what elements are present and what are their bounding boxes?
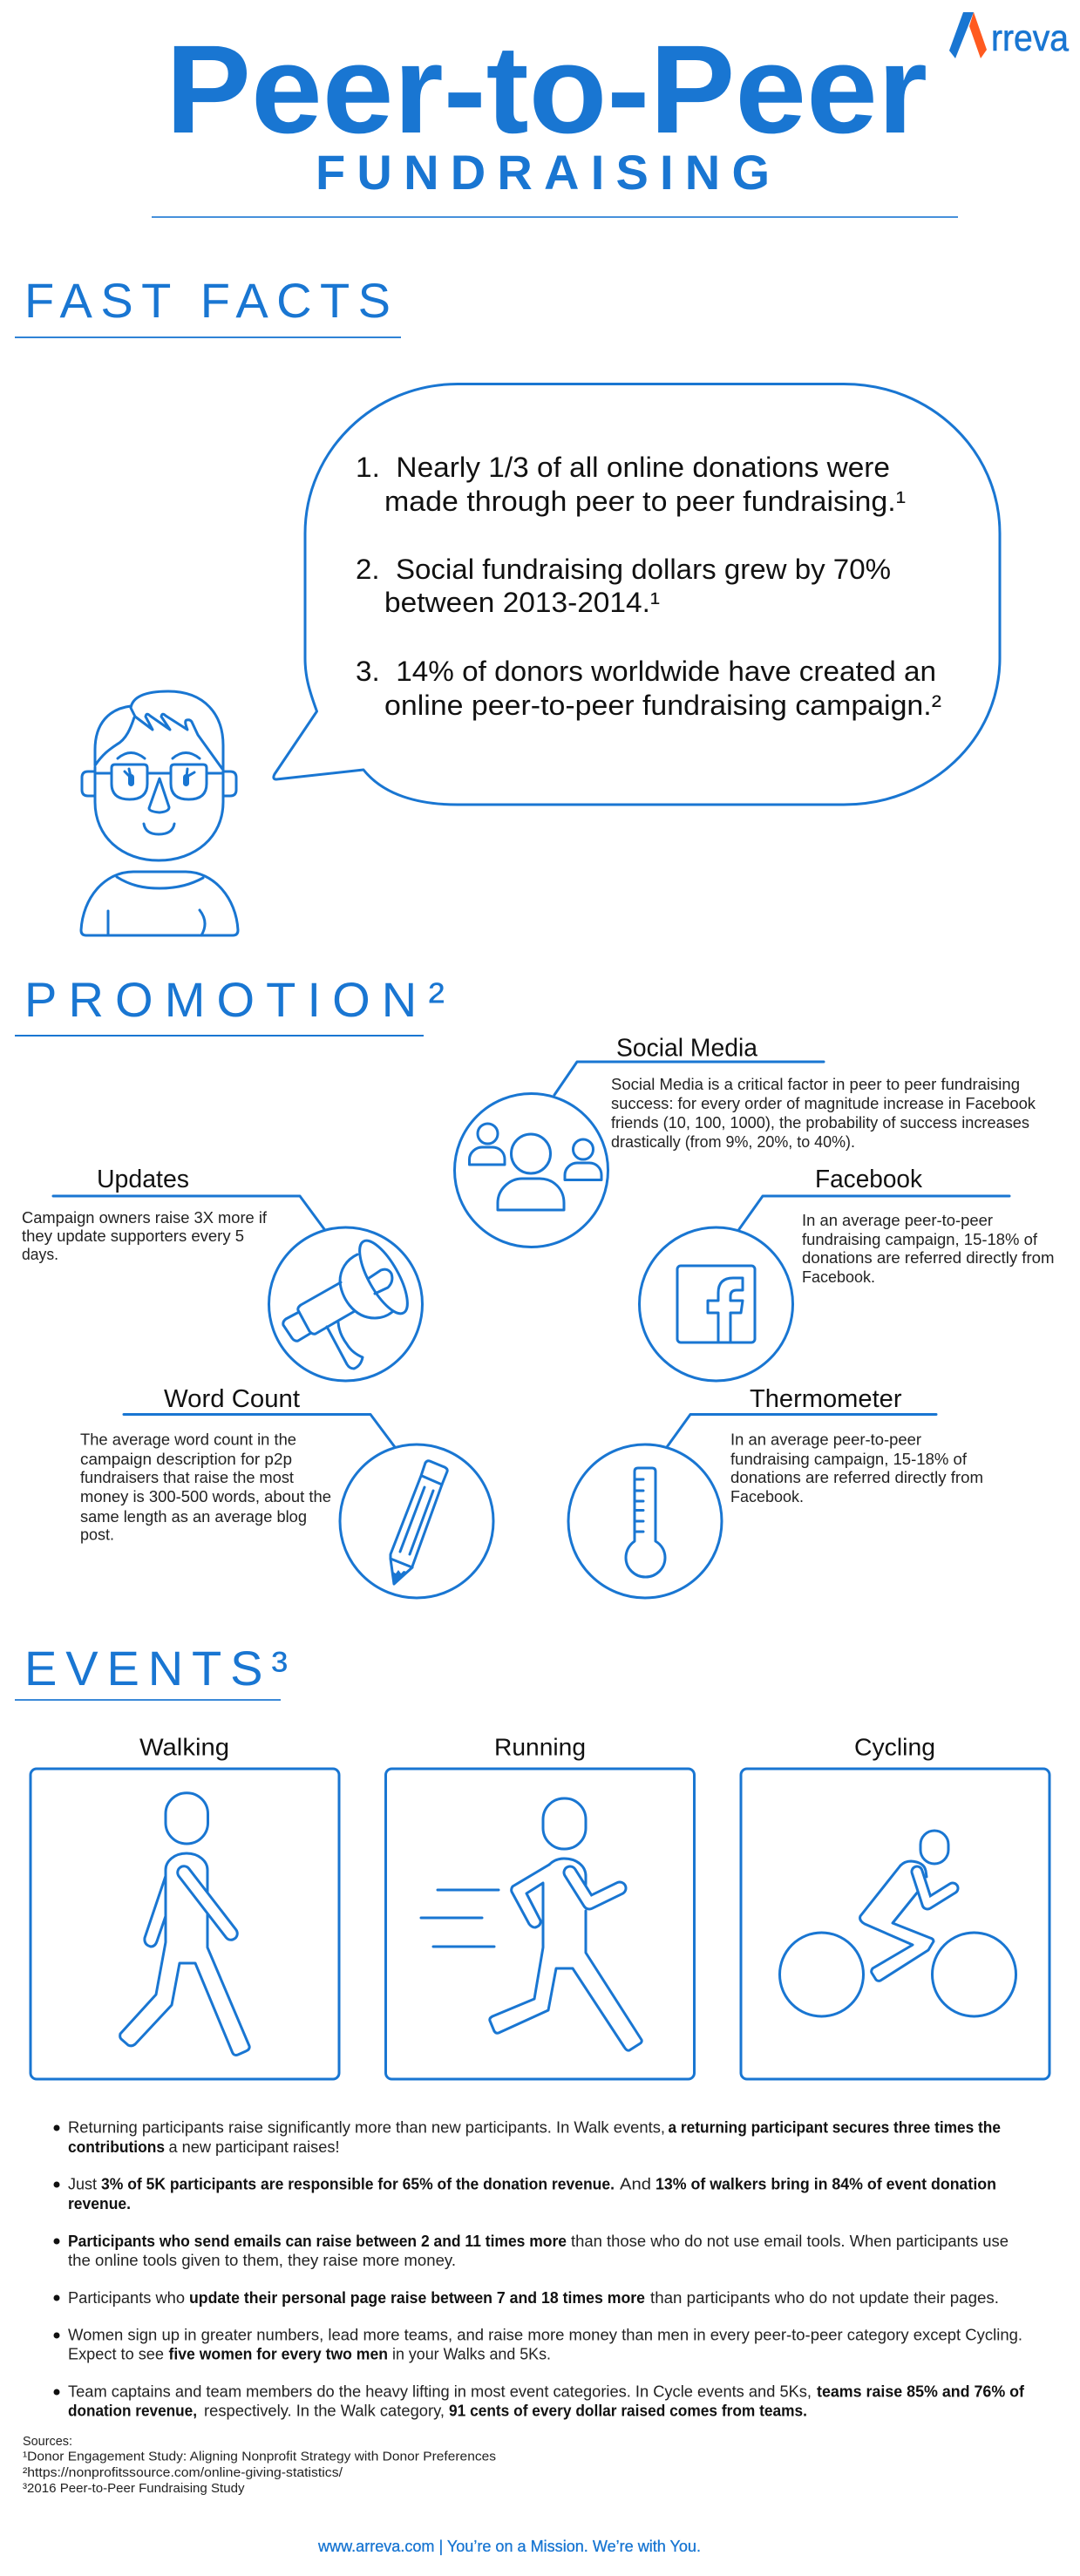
icon: cyclist [779,1831,1016,2016]
logo: Arreva [949,12,1069,59]
panel: Facebook: donations are referred directly from [802,1249,1055,1267]
bullet: team captains [54,2383,1025,2420]
icon: pencil [340,1444,493,1598]
panel: Cycling: Cycling [854,1733,935,1761]
panel: Thermometer [568,1385,983,1598]
bullet: women and men: five women for every two men [169,2345,388,2362]
bullet: 5K participants: Just [68,2176,97,2193]
panel: Social Media: friends (10, 100, 1000), the probability of success increases [611,1114,1029,1132]
panel: Social Media [455,1034,1036,1247]
text block: sources: ¹Donor Engagement Study: Aligning Nonprofit Strategy with Donor Preferences [23,2450,496,2464]
icon: thermometer [568,1444,722,1598]
panel: Word Count [80,1385,493,1598]
icon: people [455,1093,608,1247]
panel: fast facts speech bubble: made through peer to peer fundraising.¹ [384,486,906,517]
panel: Updates: Campaign owners raise 3X more if [22,1209,268,1227]
panel: Facebook: Facebook. [802,1268,875,1286]
panel: Running [385,1733,694,2079]
bullet: returning participants: Returning participants raise significantly more than new participants. In Walk events, [68,2118,665,2136]
panel: Walking [31,1733,339,2079]
panel: Thermometer: fundraising campaign, 15-18% of [730,1451,968,1468]
text block: sources [23,2434,496,2496]
bullet: team captains: Team captains and team members do the heavy lifting in most event categories. In Cycle events and 5Ks, [68,2383,812,2401]
bullet: email tools: Participants who send emails can raise between 2 and 11 times more [68,2233,567,2250]
panel: Thermometer: Thermometer [750,1385,902,1413]
heading: Events: EVENTS³ [24,1641,288,1696]
bullet: returning participants [54,2118,1001,2156]
bullet: 5K participants [54,2176,996,2212]
bullet: returning participants: a returning participant secures three times the [668,2118,1001,2136]
text block: sources: ³2016 Peer-to-Peer Fundraising Study [23,2481,245,2496]
panel: Thermometer: Facebook. [730,1488,804,1505]
bullet: personal page: Participants who [68,2289,185,2307]
panel: fast facts speech bubble [274,384,1000,805]
panel: fast facts speech bubble: online peer-to-peer fundraising campaign.² [384,690,941,721]
title: Peer-to-Peer [166,19,927,160]
bullet: email tools: the online tools given to them, they raise more money. [68,2252,456,2269]
bullet: personal page [54,2289,999,2307]
bullet: team captains: donation revenue, [68,2403,197,2420]
bullet: team captains: respectively. In the Walk category, [204,2403,445,2420]
panel: fast facts speech bubble: 2. Social fundraising dollars grew by 70% [356,554,891,585]
panel: fast facts speech bubble: between 2013-2014.¹ [384,587,660,618]
bullet: returning participants: contributions [68,2138,165,2156]
bullet: women and men [54,2326,1022,2362]
panel: Updates: days. [22,1246,58,1263]
panel: Social Media: Social Media is a critical factor in peer to peer fundraising [611,1076,1020,1093]
title: FUNDRAISING [316,145,770,200]
bullet: women and men: Expect to see [68,2345,164,2362]
bullet: returning participants: a new participant raises! [169,2138,340,2156]
panel: Thermometer: In an average peer-to-peer [730,1431,921,1449]
panel: Social Media: Social Media [616,1034,758,1062]
text block: sources: ²https://nonprofitssource.com/online-giving-statistics/ [23,2465,343,2480]
panel: Updates [22,1166,422,1381]
text block: sources: Sources: [23,2434,72,2449]
bullet: email tools: than those who do not use email tools. When participants use [571,2233,1009,2250]
bullet: 5K participants: 13% of walkers bring in 84% of event donation [655,2176,996,2193]
panel: Facebook: Facebook [815,1166,922,1193]
bullet: women and men: Women sign up in greater numbers, lead more teams, and raise more money than men in every peer-to-peer category except Cycling. [68,2326,1022,2343]
bullet: 5K participants: 3% of 5K participants are responsible for 65% of the donation revenue. [101,2176,615,2193]
panel: Word Count: money is 300-500 words, about the [80,1488,331,1505]
panel: Word Count: The average word count in the [80,1431,296,1449]
panel: Updates: they update supporters every 5 [22,1227,244,1245]
icon: person with glasses [81,691,238,935]
text block: event findings [54,2118,1025,2420]
panel: Social Media: success: for every order of magnitude increase in Facebook [611,1095,1036,1112]
bullet: email tools [54,2233,1009,2269]
logo: Arreva: rreva [991,17,1069,59]
panel: Facebook [640,1166,1055,1381]
bullet: team captains: teams raise 85% and 76% of [817,2383,1025,2401]
panel: fast facts speech bubble: 1. Nearly 1/3 of all online donations were [356,452,890,483]
panel: Thermometer: donations are referred directly from [730,1469,983,1486]
panel: Facebook: In an average peer-to-peer [802,1212,993,1229]
panel: Word Count: same length as an average blog [80,1508,307,1526]
heading: Promotion: PROMOTION² [24,972,445,1027]
panel: Facebook: fundraising campaign, 15-18% of [802,1231,1038,1248]
heading: Fast Facts: FAST FACTS [24,273,391,328]
panel: fast facts speech bubble: 3. 14% of donors worldwide have created an [356,656,936,687]
icon: walking figure [120,1793,249,2056]
panel: Word Count: post. [80,1526,114,1543]
bullet: personal page: than participants who do not update their pages. [650,2289,999,2307]
panel: Word Count: campaign description for p2p [80,1451,292,1468]
bullet: personal page: update their personal page raise between 7 and 18 times more [189,2289,645,2307]
panel: Updates: Updates [97,1166,189,1193]
panel: Cycling [741,1733,1049,2079]
panel: Word Count: fundraisers that raise the most [80,1469,294,1486]
footer: www.arreva.com | You’re on a Mission. We’re with You. [317,2538,701,2555]
bullet: women and men: in your Walks and 5Ks. [392,2345,551,2362]
bullet: team captains: 91 cents of every dollar raised comes from teams. [449,2403,807,2420]
panel: Running: Running [494,1733,586,1761]
bullet: 5K participants: revenue. [68,2195,131,2212]
icon: megaphone [268,1227,422,1381]
panel: Word Count: Word Count [164,1385,300,1413]
icon: running figure [421,1798,642,2050]
icon: facebook logo [640,1227,793,1381]
panel: Walking: Walking [139,1733,229,1761]
bullet: 5K participants: And [620,2176,651,2193]
title [152,19,958,218]
panel: Social Media: drastically (from 9%, 20%, to 40%). [611,1133,855,1151]
